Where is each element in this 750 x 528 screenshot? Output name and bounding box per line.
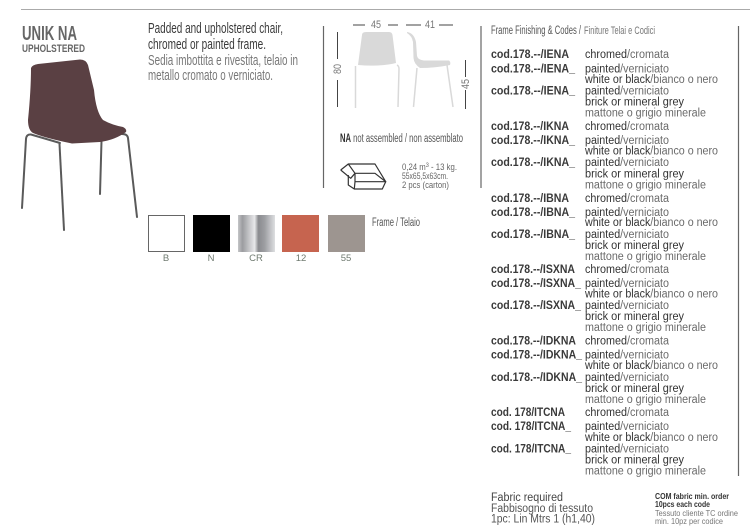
fabric required: 1pc: Lin Mtrs 1 (h1,40) xyxy=(491,514,595,526)
title xyxy=(22,23,85,55)
code group: ITCNA: white or black/bianco o nero xyxy=(584,432,718,444)
swatch: chrome CR xyxy=(238,215,275,264)
code group: ITCNA: mattone o grigio minerale xyxy=(585,466,706,478)
code group: IKNA: painted/verniciato xyxy=(585,135,669,147)
code group: ISXNA: chromed/cromata xyxy=(585,264,670,276)
code group: IDKNA: cod.178.--/IDKNA xyxy=(491,336,576,348)
code group: ITCNA: brick or mineral grey xyxy=(585,454,684,466)
code group: IENA xyxy=(491,49,718,120)
code group: IKNA xyxy=(491,121,718,192)
code group: ISXNA: mattone o grigio minerale xyxy=(585,322,706,334)
code group: IBNA xyxy=(491,193,718,263)
description xyxy=(148,20,298,84)
code group: IKNA: white or black/bianco o nero xyxy=(584,146,718,158)
code group: IBNA: painted/verniciato xyxy=(585,207,669,219)
COM fabric note xyxy=(655,491,738,526)
code group: IKNA: mattone o grigio minerale xyxy=(585,180,706,192)
swatch: white B xyxy=(148,216,184,264)
code group: IENA: painted/verniciato xyxy=(585,64,669,76)
assembly note: NA not assembled / non assemblato xyxy=(340,133,463,145)
code group: IENA: cod.178.--/IENA_ xyxy=(491,64,576,76)
code group: ISXNA: painted/verniciato xyxy=(585,278,669,290)
chair front view dimension drawing xyxy=(356,32,399,108)
swatch: mineral grey 55 xyxy=(328,215,365,264)
fabric required xyxy=(491,492,595,526)
code group: IBNA: white or black/bianco o nero xyxy=(584,217,718,229)
code group: IDKNA: cod.178.--/IDKNA_ xyxy=(491,350,583,362)
code group: ITCNA xyxy=(491,407,718,478)
code group: IBNA: mattone o grigio minerale xyxy=(585,251,706,263)
code group: ITCNA: cod. 178/ITCNA xyxy=(491,407,565,419)
packing details: 55x65,5x63cm. xyxy=(402,171,448,181)
fabric required: Fabbisogno di tessuto xyxy=(491,503,593,515)
code group: IBNA: cod.178.--/IBNA_ xyxy=(491,229,576,241)
code group: IBNA: chromed/cromata xyxy=(585,193,670,205)
code group: ISXNA: cod.178.--/ISXNA_ xyxy=(491,300,582,312)
swatch: brick 12: 12 xyxy=(296,253,306,264)
swatch: black N: N xyxy=(208,253,215,264)
code group: IENA: cod.178.--/IENA xyxy=(491,49,569,61)
description: chromed or painted frame. xyxy=(148,36,266,53)
title: UPHOLSTERED xyxy=(22,43,85,55)
code group: IBNA: cod.178.--/IBNA_ xyxy=(491,207,576,219)
description: Sedia imbottita e rivestita, telaio in xyxy=(148,52,298,69)
COM fabric note: Tessuto cliente TC ordine xyxy=(655,508,738,518)
dimension: width 45: 45 xyxy=(371,19,381,31)
codes heading: Frame Finishing & Codes / xyxy=(491,25,582,37)
frame colour swatches xyxy=(148,215,365,264)
dimension: height 80 xyxy=(332,32,344,107)
code group: IENA: white or black/bianco o nero xyxy=(584,74,718,86)
dimension: depth 41 xyxy=(406,19,453,31)
code group: IDKNA: white or black/bianco o nero xyxy=(584,360,718,372)
code group: ISXNA: white or black/bianco o nero xyxy=(584,288,718,300)
description: metallo cromato o verniciato. xyxy=(148,67,273,84)
code group: IENA: brick or mineral grey xyxy=(585,96,684,108)
fabric required: Fabric required xyxy=(491,492,563,504)
code group: IKNA: cod.178.--/IKNA_ xyxy=(491,135,576,147)
code group: IKNA: cod.178.--/IKNA xyxy=(491,121,569,133)
code group: ITCNA: painted/verniciato xyxy=(585,444,669,456)
code group: IDKNA xyxy=(491,336,718,406)
code group: IDKNA: painted/verniciato xyxy=(585,372,669,384)
packing details: 3 xyxy=(426,162,429,169)
icon: carton box xyxy=(341,164,386,189)
swatch: chrome CR: CR xyxy=(249,253,263,264)
dimension: seat height 45 xyxy=(460,60,472,109)
title: UNIK NA xyxy=(22,23,77,45)
swatch: mineral grey 55: 55 xyxy=(341,253,351,264)
code group: IBNA: brick or mineral grey xyxy=(585,240,684,252)
code group: ISXNA: painted/verniciato xyxy=(585,300,669,312)
dimension: seat height 45: 45 xyxy=(460,79,472,89)
COM fabric note: min. 10pz per codice xyxy=(655,516,723,526)
COM fabric note: COM fabric min. order xyxy=(655,491,730,501)
code group: ITCNA: cod. 178/ITCNA_ xyxy=(491,444,572,456)
frame label: Frame / Telaio xyxy=(372,217,420,229)
code group: IDKNA: mattone o grigio minerale xyxy=(585,394,706,406)
code group: IKNA: chromed/cromata xyxy=(585,121,670,133)
code group: IDKNA: cod.178.--/IDKNA_ xyxy=(491,372,583,384)
code group: IBNA: cod.178.--/IBNA xyxy=(491,193,569,205)
code group: IENA: chromed/cromata xyxy=(585,49,670,61)
code group: IKNA: cod.178.--/IKNA_ xyxy=(491,157,576,169)
packing details xyxy=(402,162,457,190)
dimension: width 45 xyxy=(353,19,398,31)
code group: ITCNA: chromed/cromata xyxy=(585,407,670,419)
codes heading: Finiture Telai e Codici xyxy=(584,25,655,37)
code group: IDKNA: brick or mineral grey xyxy=(585,383,684,395)
code group: IENA: painted/verniciato xyxy=(585,86,669,98)
code group: ISXNA: brick or mineral grey xyxy=(585,311,684,323)
dimension: depth 41: 41 xyxy=(425,19,435,31)
description: Padded and upholstered chair, xyxy=(148,20,283,37)
code group: IBNA: painted/verniciato xyxy=(585,229,669,241)
swatch: black N xyxy=(193,215,230,264)
COM fabric note: 10pcs each code xyxy=(655,499,710,509)
packing details: - 13 kg. xyxy=(429,162,457,172)
code group: ISXNA: cod.178.--/ISXNA_ xyxy=(491,278,582,290)
swatch: white B: B xyxy=(163,253,169,264)
code group: ISXNA xyxy=(491,264,718,334)
chair photo xyxy=(22,60,137,230)
code group: IDKNA: chromed/cromata xyxy=(585,336,670,348)
dimension: height 80: 80 xyxy=(332,64,344,74)
code group: IDKNA: painted/verniciato xyxy=(585,350,669,362)
chair side view dimension drawing xyxy=(407,32,453,107)
packing details: 2 pcs (carton) xyxy=(402,180,449,190)
code group: ISXNA: cod.178.--/ISXNA xyxy=(491,264,575,276)
code group: ITCNA: cod. 178/ITCNA_ xyxy=(491,421,572,433)
code group: IENA: mattone o grigio minerale xyxy=(585,108,706,120)
packing details: 0,24 m xyxy=(402,162,430,172)
code group: IENA: cod.178.--/IENA_ xyxy=(491,86,576,98)
code group: IKNA: painted/verniciato xyxy=(585,157,669,169)
code group: ITCNA: painted/verniciato xyxy=(585,421,669,433)
code group: IKNA: brick or mineral grey xyxy=(585,168,684,180)
swatch: brick 12 xyxy=(282,215,319,264)
